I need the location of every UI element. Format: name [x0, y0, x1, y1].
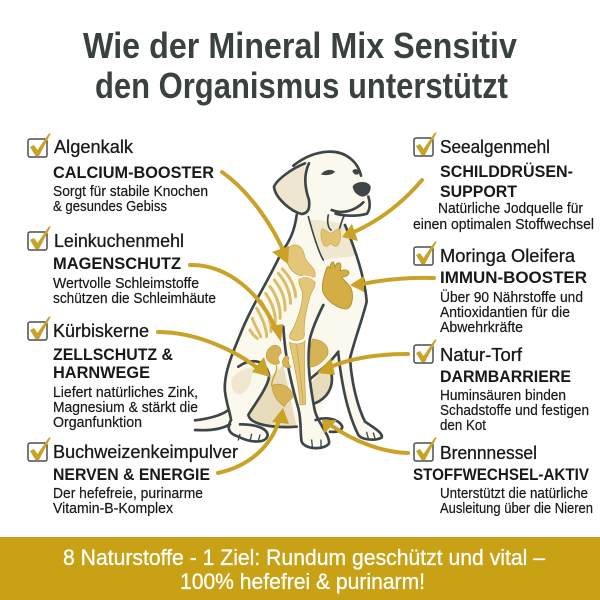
heart organ [322, 262, 352, 309]
thyroid organ [321, 229, 341, 246]
item: Seealgenmehl [413, 132, 594, 233]
item: Seealgenmehl: SCHILDDRÜSEN- [440, 162, 573, 181]
item: Moringa Oleifera: Moringa Oleifera [440, 245, 576, 266]
item: Natur-Torf: Huminsäuren binden [440, 388, 566, 404]
item: Kürbiskerne: Kürbiskerne [53, 320, 149, 341]
item: Algenkalk [28, 133, 214, 215]
icon: checkbox [28, 316, 51, 340]
item: Leinkuchenmehl: MAGENSCHUTZ [53, 255, 181, 273]
ribs [250, 269, 296, 338]
second kidney [282, 356, 291, 368]
arrow: Algenkalk to bones [222, 172, 289, 264]
arrow: Buchweizenkeimpulver to organs [218, 408, 289, 473]
item: Kürbiskerne: ZELLSCHUTZ & [53, 346, 173, 364]
neck and chest shading [310, 220, 355, 260]
hip shading [231, 367, 258, 394]
icon: checkbox [414, 339, 437, 363]
item: Leinkuchenmehl: Wertvolle Schleimstoffe [53, 276, 199, 292]
icon: checkbox [28, 133, 51, 157]
ear shading [275, 165, 309, 213]
footer banner: 8 Naturstoffe - 1 Ziel: Rundum geschützt und vital – [63, 545, 546, 570]
item: Leinkuchenmehl: schützen die Schleimhäute [53, 291, 216, 307]
item: Moringa Oleifera: Antioxidantien für die [440, 305, 570, 321]
arrow: Leinkuchenmehl to stomach [190, 265, 283, 342]
item: Algenkalk: Sorgt für stabile Knochen [53, 184, 208, 200]
item: Natur-Torf [414, 339, 589, 434]
item: Moringa Oleifera: IMMUN-BOOSTER [440, 269, 587, 287]
item: Seealgenmehl: Seealgenmehl [440, 136, 550, 157]
nose [353, 182, 371, 197]
footer banner: 100% hefefrei & purinarm! [180, 569, 425, 594]
icon: checkbox [414, 241, 437, 265]
item: Algenkalk: CALCIUM-BOOSTER [53, 164, 214, 182]
item: Moringa Oleifera [414, 241, 587, 336]
icon: checkbox [414, 437, 437, 461]
item: Buchweizenkeimpulver: NERVEN & ENERGIE [53, 466, 210, 484]
arrow: Natur-Torf to gut [317, 354, 408, 375]
item: Buchweizenkeimpulver [28, 437, 238, 517]
item: Seealgenmehl: SUPPORT [440, 183, 517, 201]
arrow: Brennnessel to kidneys [322, 420, 408, 453]
title: den Organismus unterstützt [95, 65, 508, 106]
item: Kürbiskerne [28, 316, 198, 431]
belly shading [248, 365, 332, 427]
item: Moringa Oleifera: Über 90 Nährstoffe und [440, 288, 583, 306]
item: Brennnessel: STOFFWECHSEL-AKTIV [413, 466, 589, 484]
arrow: Seealgenmehl to thyroid [342, 180, 422, 241]
eyes [321, 169, 359, 175]
item: Leinkuchenmehl [28, 226, 216, 307]
item: Algenkalk: & gesundes Gebiss [53, 199, 167, 215]
kidney [266, 345, 281, 364]
item: Buchweizenkeimpulver: Der hefefreie, purinarme [53, 486, 203, 502]
foreleg bones [289, 276, 315, 405]
item: Buchweizenkeimpulver: Vitamin-B-Komplex [53, 501, 174, 517]
item: Kürbiskerne: Magnesium & stärkt die [53, 400, 198, 416]
item: Moringa Oleifera: Abwehrkräfte [440, 320, 523, 336]
title [83, 25, 517, 106]
icon: checkbox [414, 132, 437, 156]
item: Buchweizenkeimpulver: Buchweizenkeimpulver [53, 441, 238, 462]
item: Brennnessel: Unterstützt die natürliche [440, 486, 588, 502]
item: Brennnessel [413, 437, 593, 517]
icon: checkbox [28, 226, 51, 250]
item: Seealgenmehl: Natürliche Jodquelle für [438, 201, 583, 217]
item: Brennnessel: Brennnessel [440, 442, 537, 463]
item: Natur-Torf: DARMBARRIERE [440, 368, 571, 386]
icon: checkbox [28, 437, 51, 461]
item: Natur-Torf: Natur-Torf [440, 344, 523, 365]
arrow: Moringa to heart [350, 276, 434, 292]
shoulder blade [286, 245, 315, 277]
item: Natur-Torf: Schadstoffe und festigen [440, 403, 589, 419]
item: Seealgenmehl: einen optimalen Stoffwechsel [413, 217, 594, 233]
dog illustration [195, 152, 382, 448]
arrow: Kürbiskerne to bladder [158, 332, 270, 377]
stomach and gut [310, 339, 328, 367]
item: Kürbiskerne: Organfunktion [53, 415, 142, 431]
dog body fill [195, 152, 382, 443]
item: Natur-Torf: den Kot [440, 418, 486, 434]
title: Wie der Mineral Mix Sensitiv [83, 25, 517, 66]
item: Leinkuchenmehl: Leinkuchenmehl [54, 230, 184, 251]
ureter [272, 366, 277, 386]
item: Kürbiskerne: HARNWEGE [53, 364, 150, 382]
footer banner [0, 537, 600, 600]
item: Algenkalk: Algenkalk [54, 136, 134, 157]
dog outline [195, 152, 382, 448]
bladder [272, 384, 294, 407]
item: Kürbiskerne: Liefert natürliches Zink, [53, 385, 198, 401]
